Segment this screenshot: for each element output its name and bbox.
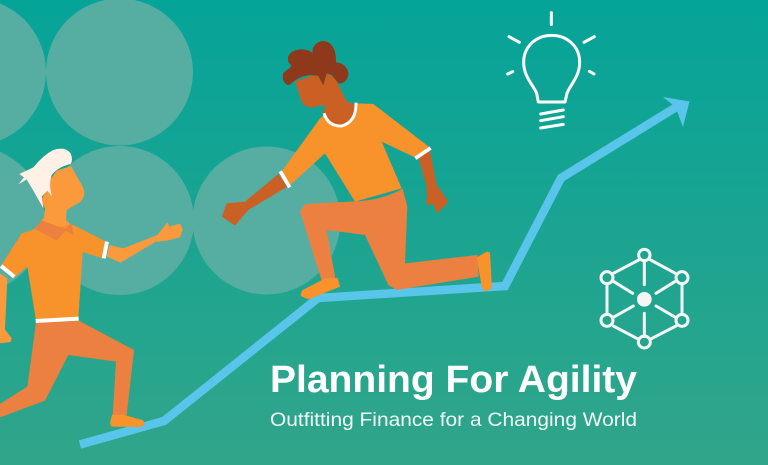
- neck and head: [35, 166, 84, 230]
- sleeve cuffs: [1, 242, 107, 277]
- back shoe: [477, 251, 492, 292]
- decorative translucent circles: [0, 0, 340, 295]
- shoe: [110, 415, 144, 427]
- orange shirt: [0, 225, 106, 321]
- trousers: [300, 189, 479, 290]
- white neckline: [324, 103, 356, 126]
- curly hair: [283, 41, 348, 85]
- figure: kneeling man with curly hair: [222, 41, 492, 299]
- rising arrow line: [80, 97, 690, 444]
- front shoe: [301, 278, 340, 299]
- head and neck: [295, 73, 357, 125]
- waistband: [36, 319, 79, 321]
- subtitle: Outfitting Finance for a Changing World: [270, 409, 637, 431]
- icon: network hexagon: [601, 249, 688, 348]
- right arm and hand: [419, 151, 448, 213]
- title: Planning For Agility: [270, 359, 637, 401]
- left arm: [0, 273, 12, 343]
- orange sweater: [282, 103, 430, 202]
- right forearm and hand: [107, 222, 183, 263]
- trousers: [0, 321, 134, 417]
- figure: man with white hair on left: [0, 149, 183, 427]
- white hair: [18, 149, 72, 208]
- shirt collar: [34, 221, 73, 241]
- icon: light bulb: [508, 13, 594, 128]
- left arm and hand: [222, 174, 287, 226]
- white cuffs: [280, 148, 431, 187]
